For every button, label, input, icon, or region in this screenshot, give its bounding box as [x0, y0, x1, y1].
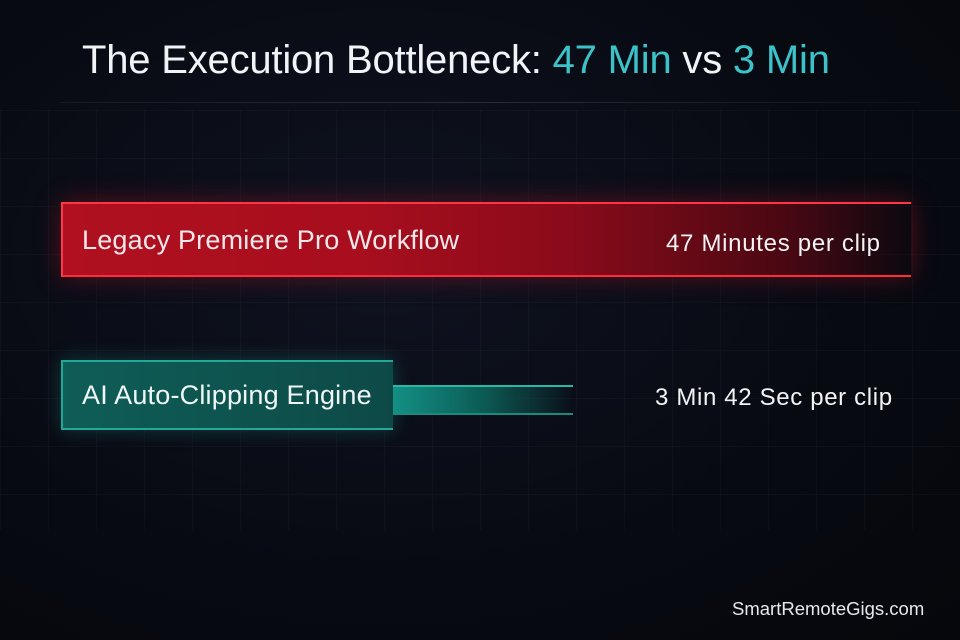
value: 3 min 42 sec: 3 Min 42 Sec per clip — [655, 384, 893, 411]
value: 47 minutes: 47 Minutes per clip — [666, 230, 881, 257]
footer brand: SmartRemoteGigs.com — [732, 598, 924, 619]
bar: legacy workflow — [61, 202, 911, 277]
bar: AI engine — [61, 360, 393, 430]
bar extension: AI short bar — [393, 385, 573, 415]
title: The Execution Bottleneck: 47 Min vs 3 Min — [82, 38, 830, 82]
label: legacy: Legacy Premiere Pro Workflow — [82, 225, 459, 255]
label: AI: AI Auto-Clipping Engine — [82, 380, 372, 410]
